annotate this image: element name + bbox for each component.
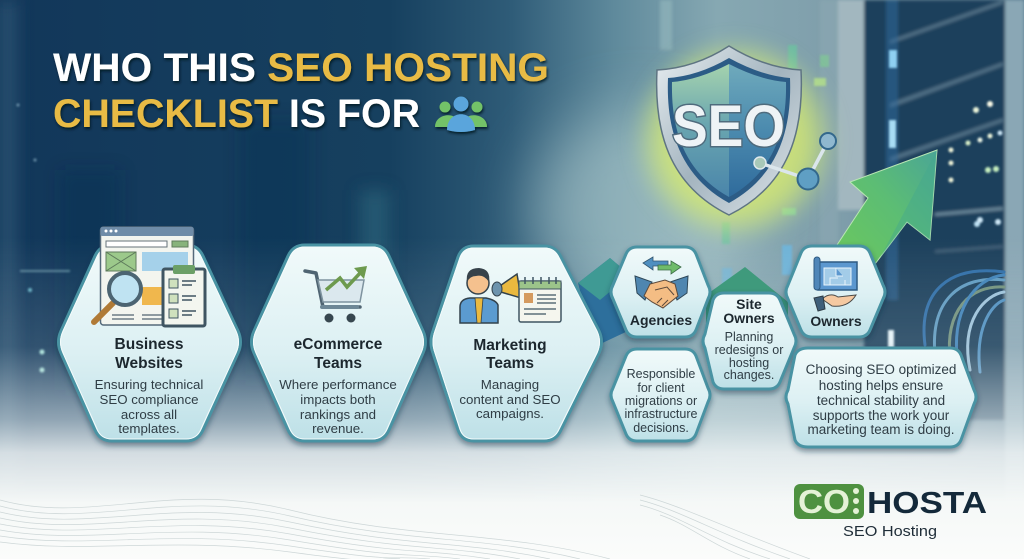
- panel: agencies description: [611, 349, 710, 441]
- panel: agencies: Agencies: [630, 312, 692, 328]
- panel: agencies description: migrations or: [625, 394, 697, 408]
- logo: cohosta: SEO Hosting: [843, 523, 937, 540]
- panel: ecommerce teams: rankings and: [300, 407, 376, 422]
- logo: cohosta: CO: [798, 483, 850, 520]
- panel: closing note: supports the work your: [813, 408, 950, 423]
- panel: site owners: Site: [736, 296, 762, 312]
- server LED lights: [16, 45, 1002, 372]
- panel: business websites: templates.: [118, 421, 180, 436]
- icon: shield with SEO: [630, 35, 840, 245]
- panel: ecommerce teams: eCommerce: [294, 336, 383, 353]
- panel: business websites: Business: [115, 336, 183, 353]
- panel: business websites: Ensuring technical: [95, 377, 203, 392]
- panel: business websites: [58, 227, 240, 441]
- zigzag arrow segments behind hexagons: [578, 258, 788, 346]
- icon: website audit: [94, 227, 205, 326]
- icon: shopping cart with trend: [305, 266, 367, 322]
- logo: cohosta: HOSTA: [867, 485, 987, 520]
- panel: agencies description: decisions.: [633, 421, 689, 435]
- panel: marketing teams: [431, 246, 602, 441]
- logo: cohosta: [794, 483, 987, 540]
- panel: ecommerce teams: revenue.: [312, 421, 364, 436]
- panel: marketing teams: Teams: [486, 355, 534, 372]
- panel: marketing teams: campaigns.: [476, 406, 544, 421]
- panel: site owners: redesigns or: [715, 343, 783, 357]
- panel: closing note: technical stability and: [817, 393, 945, 408]
- panel: business websites: across all: [121, 407, 177, 422]
- panel: closing note: [786, 348, 976, 447]
- panel: agencies: [611, 247, 710, 337]
- panel: site owners: Planning: [725, 330, 773, 344]
- panel: ecommerce teams: [252, 245, 426, 441]
- title: CHECKLIST IS FOR: [53, 92, 420, 136]
- panel: marketing teams: Marketing: [473, 337, 547, 354]
- panel: site owners: hosting: [729, 356, 769, 370]
- icon: marketer with megaphone and calendar: [460, 268, 561, 323]
- panel: ecommerce teams: Where performance: [279, 377, 397, 392]
- panel: owners: [786, 246, 885, 337]
- panel: ecommerce teams: impacts both: [300, 392, 376, 407]
- panel: closing note: marketing team is doing.: [807, 422, 955, 437]
- arrow: rising green growth arrow: [835, 150, 937, 268]
- title: WHO THIS SEO HOSTING: [53, 46, 549, 90]
- panel: marketing teams: Managing: [481, 377, 539, 392]
- panel: business websites: Websites: [115, 355, 183, 372]
- network cables: [924, 271, 1004, 372]
- panel: closing note: hosting helps ensure: [819, 378, 943, 393]
- panel: site owners: changes.: [724, 368, 774, 382]
- icon: shield with SEO: SEO: [672, 94, 785, 159]
- panel: marketing teams: content and SEO: [459, 392, 561, 407]
- title: [53, 46, 549, 136]
- decorative bottom waves: [0, 495, 810, 559]
- icon: handshake: [635, 257, 688, 308]
- icon: people group: [435, 96, 487, 132]
- panel: owners: Owners: [810, 313, 862, 329]
- panel: agencies description: for client: [637, 381, 685, 395]
- panel: agencies description: Responsible: [627, 367, 695, 381]
- panel: closing note: Choosing SEO optimized: [806, 362, 956, 377]
- panel: site owners: [703, 293, 796, 389]
- panel: agencies description: infrastructure: [625, 407, 698, 421]
- panel: site owners: Owners: [723, 310, 775, 326]
- panel: business websites: SEO compliance: [99, 392, 199, 407]
- panel: ecommerce teams: Teams: [314, 355, 362, 372]
- icon: blueprint in hand: [814, 257, 857, 311]
